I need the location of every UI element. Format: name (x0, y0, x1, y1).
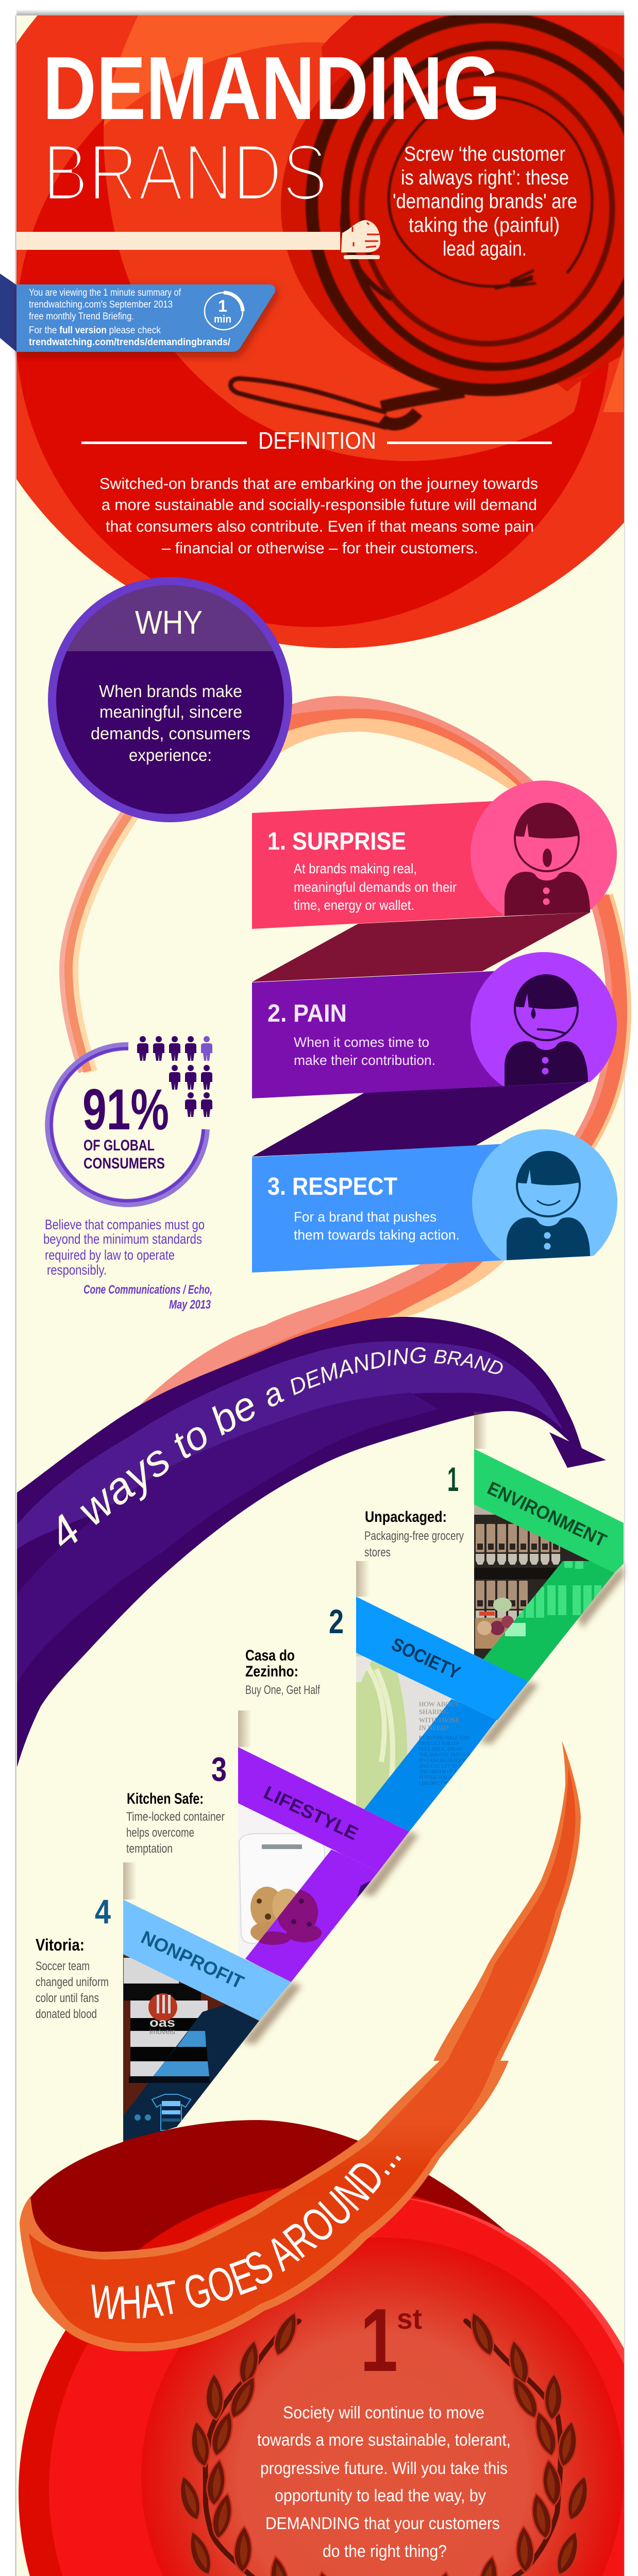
definition text: Switched-on brands that are embarking on the journey towards (99, 474, 538, 493)
photo: buy one get half: THE AMOUNT PAID GOES (419, 1752, 474, 1757)
panel: why circle (48, 577, 292, 822)
respect text: For a brand that pushes (294, 1209, 436, 1225)
heading: surprise: 1. SURPRISE (267, 828, 406, 855)
ribbon text: 4 ways to be a DEMANDING BRAND (59, 1347, 503, 1547)
stat description: required by law to operate (45, 1247, 175, 1263)
panel: way 4 nonprofit (36, 1862, 291, 2148)
tagline: is always right’: these (401, 166, 569, 189)
icon: 1 min clock: min (214, 314, 231, 325)
vitoria text: color until fans (36, 1991, 99, 2005)
panel: way 1 environment (364, 1412, 624, 1685)
icon: 1 min clock (205, 293, 243, 330)
tagline: 'demanding brands' are (393, 190, 577, 213)
tagline: lead again. (443, 238, 527, 260)
vitoria text (36, 1936, 109, 2021)
photo: buy one get half: TO CASA DO ZEZINHO, (419, 1758, 468, 1763)
photo overlay (245, 1850, 381, 1984)
surprise text: At brands making real, (294, 861, 417, 876)
icon: laurel wreath (175, 2309, 593, 2576)
pain text: When it comes time to (294, 1035, 429, 1050)
definition text (99, 474, 538, 557)
hero whip backdrop circle (281, 21, 638, 392)
photo: buy one get half: HOW ABOUT (419, 1700, 459, 1708)
hero lower right accent (603, 347, 624, 412)
shadows: ribbon ends (242, 1564, 624, 2044)
photo: buy one get half: FULL PRICE, 50% OF (419, 1747, 463, 1752)
ribbon text: WHAT GOES AROUND... (91, 2156, 401, 2319)
icon: whip (231, 17, 638, 428)
label: OF GLOBAL (83, 1137, 155, 1154)
backdrop bright red (49, 2194, 638, 2576)
photo: buy one get half: THE DREAM OF A BETTER (419, 1769, 476, 1774)
label: CONSUMERS (83, 1155, 165, 1172)
closing text (257, 2403, 511, 2561)
photo: vitoria shirts (123, 1953, 262, 2148)
photo: buy one get half: BY BUYING HALF THIS (419, 1735, 469, 1740)
vitoria text: changed uniform (36, 1975, 109, 1989)
icon: 1 min clock: 1 (218, 297, 227, 315)
closing text: progressive future. Will you take this (260, 2459, 508, 2478)
respect text (294, 1209, 460, 1243)
photo: packaging-free store (474, 1504, 614, 1682)
rainbow ribbon: top arc (273, 696, 546, 793)
panel: 1 surprise (252, 781, 617, 929)
stat description (43, 1217, 205, 1278)
hero inner red circle (16, 32, 611, 627)
stat description: Believe that companies must go (45, 1217, 205, 1232)
panel: way 2 society (245, 1561, 528, 1834)
arrow ribbon: 4 ways (17, 1317, 606, 1767)
surprise text: time, energy or wallet. (294, 897, 414, 913)
backdrop glow (141, 2238, 624, 2576)
ribbon: nonprofit (123, 1900, 291, 2021)
definition text: that consumers also contribute. Even if that means some pain (106, 517, 534, 535)
panel: 2 pain (252, 952, 617, 1098)
definition text: a more sustainable and socially-responsible future will demand (102, 496, 537, 514)
panel: 3 respect (252, 1129, 617, 1275)
kitchen safe text: helps overcome (126, 1826, 194, 1840)
casa do zezinho text: Casa do (245, 1647, 295, 1664)
ribbon: environment (474, 1449, 624, 1573)
ring (49, 1046, 206, 1203)
why text: meaningful, sincere (99, 702, 242, 721)
photo overlay (124, 2005, 259, 2141)
photo overlay (483, 1561, 614, 1682)
photo: buy one get half: AND YOU GET TO SHARE (419, 1764, 474, 1769)
award: first place: 1 (360, 2290, 398, 2390)
backdrop red (19, 2184, 638, 2576)
backdrop dark red (30, 2120, 624, 2576)
source (83, 1283, 212, 1312)
why text: experience: (129, 745, 212, 765)
photo: buy one get half (356, 1649, 500, 1834)
tagline: taking the (painful) (409, 214, 560, 236)
tagline: Screw ‘the customer (404, 143, 565, 165)
respect text: them towards taking action. (294, 1227, 460, 1243)
rainbow ribbon: left side (64, 809, 138, 1072)
surprise text (294, 861, 457, 913)
tagline (393, 143, 577, 260)
closing text: opportunity to lead the way, by (275, 2486, 486, 2505)
stat description: beyond the minimum standards (43, 1231, 202, 1247)
ribbon: society: SOCIETY (389, 1633, 464, 1683)
photo: vitoria shirts: oas (149, 2016, 175, 2030)
callout: 1 minute summary: For the full version please check (29, 325, 161, 336)
ribbon: what goes around (20, 1741, 581, 2351)
casa do zezinho text: Zezinho: (245, 1663, 298, 1680)
connector between 1 and 2 (252, 912, 590, 982)
kitchen safe text: Kitchen Safe: (127, 1790, 204, 1807)
panel: what goes around (19, 2120, 638, 2576)
hero light orange sweep (104, 15, 354, 126)
photo: buy one get half: CHILDREN WITH (419, 1781, 456, 1786)
closing text: do the right thing? (323, 2541, 447, 2561)
heading: pain: 2. PAIN (267, 1000, 347, 1027)
vitoria text: Vitoria: (36, 1936, 85, 1954)
closing text: towards a more sustainable, tolerant, (257, 2430, 511, 2449)
unpackaged text: Unpackaged: (365, 1509, 447, 1526)
kitchen safe text: temptation (126, 1842, 173, 1856)
pain text (294, 1035, 435, 1068)
callout: 1 minute summary (0, 274, 275, 352)
callout: 1 minute summary: You are viewing the 1 minute summary of (29, 287, 181, 298)
number 3: 3 (211, 1750, 227, 1788)
number: 91% (82, 1077, 169, 1142)
unpackaged text: Packaging-free grocery (364, 1529, 464, 1543)
why text (91, 682, 250, 765)
label (83, 1137, 165, 1172)
vitoria text: Soccer team (36, 1959, 90, 1973)
photo: buy one get half: FUTURE FOR MANY (419, 1775, 463, 1780)
photo: buy one get half: WITH THOSE (419, 1716, 460, 1724)
pain text: make their contribution. (294, 1053, 435, 1068)
stat description: responsibly. (47, 1262, 107, 1278)
photo: buy one get half: PRODUCT FOR ITS (419, 1741, 459, 1746)
vitoria text: donated blood (36, 2007, 97, 2021)
photo: buy one get half: IN NEED? (419, 1724, 449, 1732)
title: DEMANDING (43, 38, 500, 138)
why text: When brands make (99, 682, 242, 701)
backdrop edge (57, 2194, 638, 2576)
icon: crying face (471, 952, 617, 1098)
source: Cone Communications / Echo, (83, 1283, 212, 1297)
ribbon: environment: ENVIRONMENT (484, 1477, 610, 1551)
callout: 1 minute summary: trendwatching.com/trends/demandingbrands/ (29, 337, 231, 348)
ribbon: lifestyle (238, 1747, 409, 1872)
connector between 2 and 3 (252, 1082, 588, 1157)
kitchen safe text: Time-locked container (126, 1810, 225, 1824)
photo: vitoria shirts: imóveis (149, 2028, 176, 2036)
kitchen safe text (126, 1790, 225, 1856)
ribbon: nonprofit: NONPROFIT (138, 1926, 247, 1993)
closing text: DEMANDING that your customers (265, 2514, 500, 2533)
icon: arm holding whip (16, 220, 380, 259)
photo: kitchen safe (238, 1798, 382, 1984)
surprise text: meaningful demands on their (294, 879, 457, 895)
definition text: – financial or otherwise – for their customers. (162, 539, 478, 557)
callout: 1 minute summary: free monthly Trend Briefing. (29, 311, 134, 322)
panel: way 3 lifestyle (126, 1710, 409, 1984)
award: first place: st (397, 2302, 422, 2335)
unpackaged text (364, 1509, 464, 1560)
icon: surprised face (471, 781, 617, 927)
panel: hero (0, 0, 638, 648)
casa do zezinho text: Buy One, Get Half (245, 1683, 320, 1697)
ribbon: society (356, 1597, 528, 1720)
heading: why: WHY (135, 604, 203, 641)
hero big orange circle (0, 0, 638, 648)
heading: respect: 3. RESPECT (267, 1173, 397, 1200)
casa do zezinho text (245, 1647, 320, 1697)
heading: definition: DEFINITION (258, 427, 376, 454)
hero inner orange shape (104, 42, 583, 461)
number 2: 2 (329, 1602, 344, 1640)
callout: 1 minute summary: trendwatching.com's September 2013 (29, 299, 173, 310)
photo: buy one get half: SHARING (419, 1708, 449, 1716)
stat: 91 percent (49, 1036, 212, 1203)
icon: people (137, 1036, 212, 1117)
closing text: Society will continue to move (283, 2403, 484, 2422)
photo overlay (361, 1699, 500, 1834)
icon: smiling face (472, 1129, 617, 1275)
heading: definition (81, 427, 552, 454)
hero top right red (322, 15, 624, 392)
rainbow ribbon: right side (574, 896, 622, 1154)
ribbon: lifestyle: LIFESTYLE (261, 1782, 361, 1844)
unpackaged text: stores (364, 1546, 391, 1560)
rainbow ribbon: lower sweep (140, 1257, 508, 1405)
why text: demands, consumers (91, 724, 250, 743)
source: May 2013 (169, 1298, 211, 1312)
subtitle: BRANDS (43, 128, 328, 217)
number 4: 4 (95, 1892, 111, 1930)
number 1: 1 (447, 1460, 459, 1498)
